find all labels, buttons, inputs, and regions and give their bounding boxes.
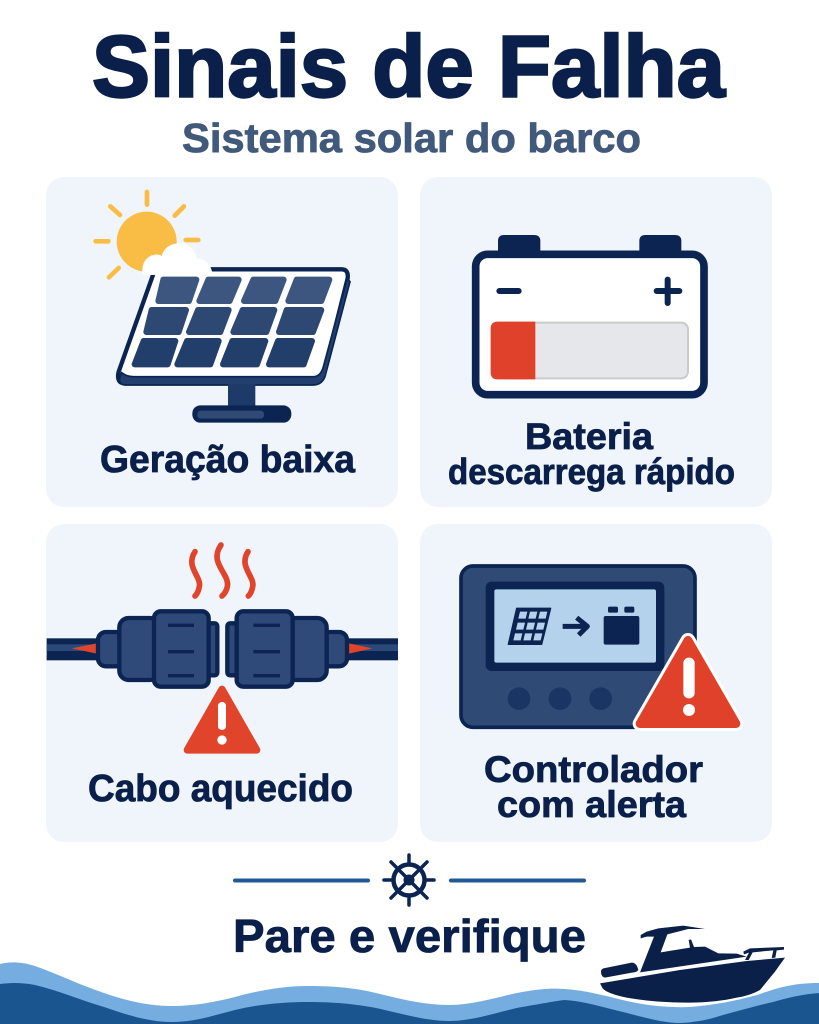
panel: controlador	[420, 524, 772, 842]
label: controlador com alerta: Controlador	[484, 749, 703, 790]
title: Sinais de Falha	[92, 18, 726, 116]
icon: heated cable connector	[47, 545, 398, 750]
panel: cabo aquecido	[46, 524, 398, 842]
label: geração baixa: Geração baixa	[100, 439, 356, 481]
icon: heat waves	[192, 545, 253, 596]
icon: ship wheel	[384, 855, 434, 905]
label: bateria descarrega rápido: Bateria	[525, 416, 653, 457]
subtitle: Sistema solar do barco	[182, 115, 641, 161]
panel: geração baixa	[46, 177, 398, 507]
icon: charge controller	[461, 566, 736, 727]
icon: warning triangle	[187, 689, 257, 750]
panel: bateria	[420, 177, 772, 507]
label: cabo aquecido: Cabo aquecido	[88, 768, 353, 810]
label: controlador com alerta	[484, 749, 703, 825]
label: controlador com alerta: com alerta	[497, 784, 686, 825]
icon: solar panel with sun	[96, 192, 350, 423]
waves	[0, 962, 819, 1024]
footer divider with ship wheel	[233, 855, 586, 905]
label: bateria descarrega rápido: descarrega rápido	[448, 451, 735, 492]
call to action: Pare e verifique	[233, 910, 586, 962]
icon: warning triangle	[640, 640, 736, 724]
icon: battery low	[476, 235, 704, 395]
icon: boat	[600, 926, 785, 1003]
label: bateria descarrega rápido	[448, 416, 735, 492]
